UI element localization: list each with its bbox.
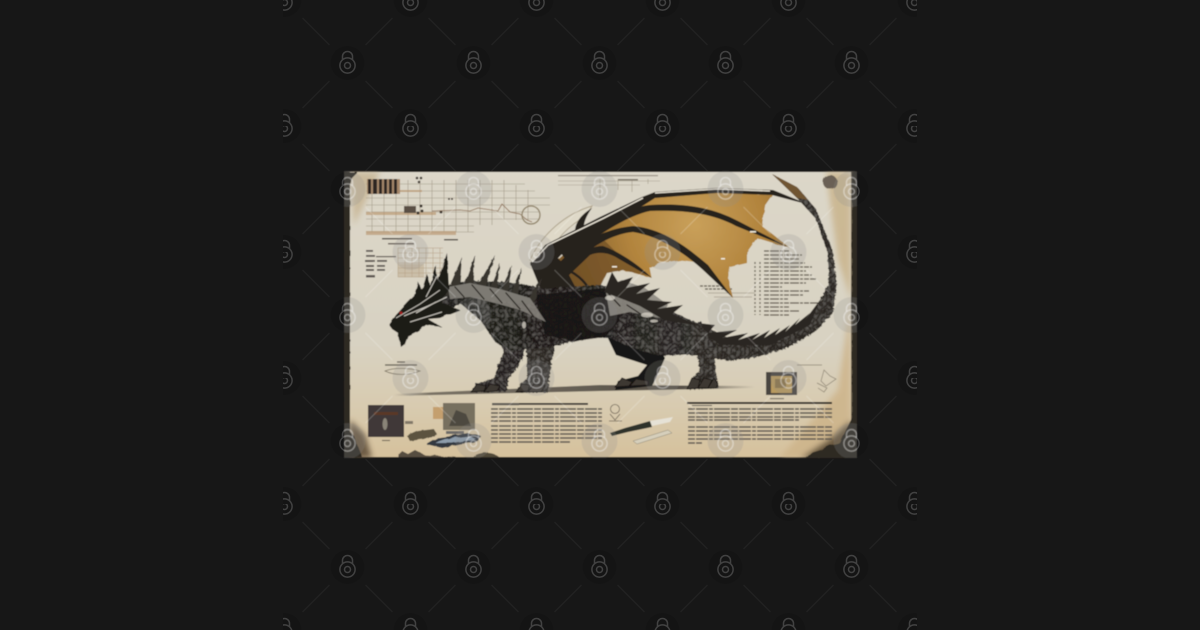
text block: right list	[755, 251, 818, 315]
tail	[684, 174, 836, 360]
wing highlight	[532, 189, 770, 262]
chart: top centre note	[558, 175, 660, 198]
tail spines	[690, 300, 820, 345]
ring diagram	[522, 206, 540, 224]
neck silver band	[448, 283, 546, 322]
wing shoulder mass	[530, 248, 578, 300]
chart: engineering grid top left	[366, 177, 550, 235]
icon: stones row 1	[407, 429, 437, 441]
grid lines	[366, 180, 550, 232]
spar 3	[558, 246, 652, 278]
near front leg	[516, 330, 556, 392]
scale highlights on body	[455, 285, 654, 317]
text block: left article	[491, 403, 602, 442]
back silver scales	[605, 280, 668, 318]
text block: caption under grid	[382, 238, 458, 244]
illustration: dragon	[389, 174, 836, 392]
pale far wing	[530, 206, 592, 266]
mane highlights	[396, 276, 447, 322]
icon: dark specimen box	[368, 405, 413, 441]
panel: aged edge stains	[344, 172, 857, 458]
back spines	[604, 272, 700, 326]
shiny scales	[522, 296, 658, 328]
wing elbow claw	[575, 208, 592, 232]
orange annotation bars	[366, 190, 456, 235]
line graph trace	[432, 204, 532, 222]
dark shoulder shade	[535, 288, 620, 341]
near hind leg	[655, 320, 718, 389]
leading edge	[530, 188, 810, 272]
wing bones	[530, 188, 810, 300]
icon: framed photograph	[766, 372, 797, 399]
wing shading near root	[548, 236, 648, 298]
wing membrane tears	[612, 231, 756, 268]
watermark lattice on dark background	[283, 0, 917, 630]
far front leg	[471, 320, 530, 392]
spar 1	[560, 204, 790, 260]
watermark lattice on poster	[344, 171, 857, 458]
eye	[400, 312, 402, 314]
panel: parchment poster	[344, 171, 857, 458]
head and mane	[389, 253, 460, 347]
icon: engraving picture	[443, 403, 475, 434]
icon: emblem	[609, 404, 622, 421]
neck spines	[446, 255, 542, 304]
spar 2	[560, 226, 733, 298]
wing root curve	[557, 265, 590, 292]
torso and neck	[412, 280, 714, 355]
icon: stones row 2	[426, 433, 481, 448]
dark data marks	[404, 177, 453, 214]
icon: dagger	[610, 417, 673, 444]
text block: right article	[687, 402, 832, 443]
label: head note	[385, 362, 420, 374]
icon: barcode block	[367, 179, 400, 194]
shadow: ground	[394, 385, 755, 396]
icon: tan note	[433, 407, 443, 419]
wing membrane	[545, 192, 790, 300]
claws	[471, 378, 718, 392]
table: specification table	[365, 248, 443, 278]
far hind leg	[605, 332, 665, 390]
label: wing note	[700, 286, 755, 297]
icon: small sketches	[797, 365, 836, 392]
